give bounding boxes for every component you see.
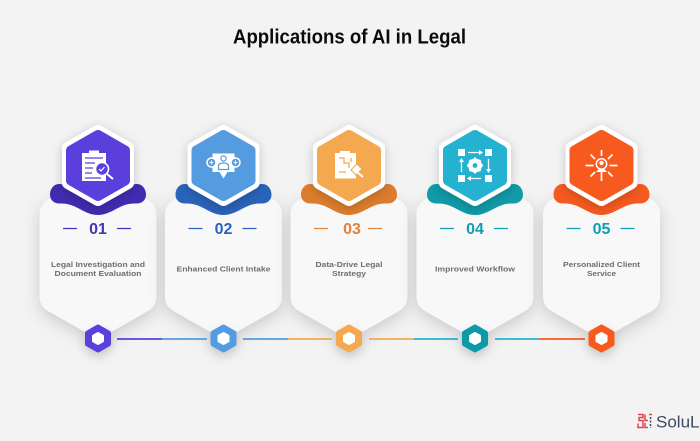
icon: workflow gear xyxy=(458,149,492,182)
wing xyxy=(554,184,650,215)
hexagon badge xyxy=(572,131,632,200)
number xyxy=(188,221,256,238)
hexagon badge xyxy=(68,131,128,200)
wing xyxy=(176,184,272,215)
number xyxy=(566,221,634,238)
number: 03 xyxy=(343,221,361,238)
number: 05 xyxy=(593,221,610,238)
label: Legal Investigation and xyxy=(51,260,145,269)
label xyxy=(316,260,382,278)
icon: strategy clipboard with gavel xyxy=(335,151,363,178)
number: 04 xyxy=(466,221,484,238)
logo wordmark: SoluL xyxy=(656,412,699,432)
label xyxy=(51,260,145,278)
hexagon badge xyxy=(194,131,254,200)
card body xyxy=(165,198,282,338)
node 4 xyxy=(464,327,486,350)
connector lines xyxy=(117,338,585,340)
logo xyxy=(638,412,699,432)
hexagon badge xyxy=(319,131,379,200)
wing xyxy=(301,184,397,215)
card body xyxy=(416,198,534,338)
panel: card 05 xyxy=(543,131,660,338)
label: Data-Drive Legal xyxy=(316,260,382,269)
panel: card 03 xyxy=(290,131,408,338)
label: Improved Workflow xyxy=(435,264,515,274)
hexagon badge xyxy=(445,131,505,200)
title: Applications of AI in Legal xyxy=(233,26,466,48)
card body xyxy=(40,198,156,338)
node 1 xyxy=(88,327,108,350)
label: Document Evaluation xyxy=(54,269,142,278)
card body xyxy=(290,198,408,338)
node 3 xyxy=(338,327,360,350)
label: Personalized Client xyxy=(563,260,641,269)
wing xyxy=(427,184,523,215)
label: Strategy xyxy=(332,269,367,278)
card body xyxy=(543,198,660,338)
panel: card 02 xyxy=(165,131,282,338)
label: Service xyxy=(587,269,616,278)
panel: card 01 xyxy=(40,131,156,338)
node 5 xyxy=(591,327,612,350)
number xyxy=(314,221,382,238)
icon: client intake xyxy=(207,154,240,178)
label: Enhanced Client Intake xyxy=(176,264,270,274)
node 2 xyxy=(213,327,234,350)
label xyxy=(563,260,641,278)
wing xyxy=(50,184,146,215)
icon: personalized service xyxy=(586,150,618,181)
number xyxy=(63,221,131,238)
number xyxy=(440,221,508,238)
icon: clipboard with magnifier xyxy=(82,150,113,181)
number: 01 xyxy=(89,221,107,238)
panel: card 04 xyxy=(416,131,534,338)
number: 02 xyxy=(215,221,232,238)
icon: logo mark xyxy=(638,414,652,428)
